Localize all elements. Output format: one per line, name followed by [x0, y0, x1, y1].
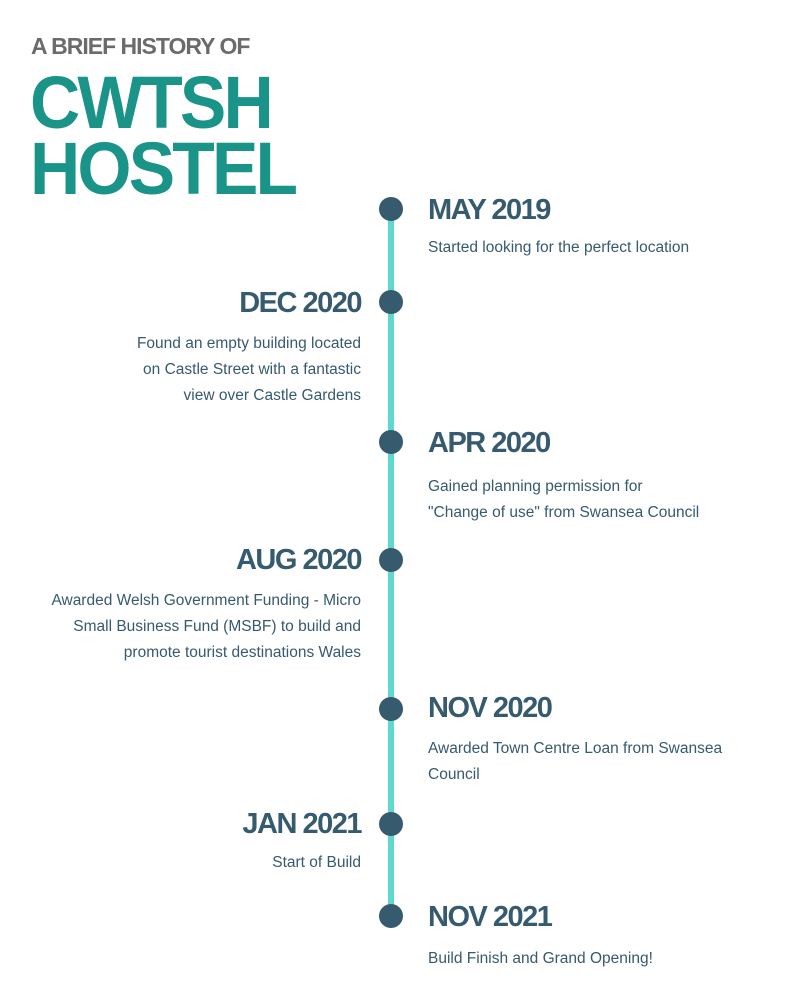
event: Dec 2020: view over Castle Gardens — [184, 387, 361, 404]
event: May 2019: Started looking for the perfect location — [428, 239, 689, 256]
timeline line — [388, 210, 394, 916]
event: Dec 2020 — [137, 287, 362, 404]
title: subtitle: A BRIEF HISTORY OF — [31, 33, 249, 59]
title: main — [30, 61, 296, 210]
event: Jan 2021: Start of Build — [272, 854, 361, 871]
dot 7 — [379, 904, 403, 928]
event: Aug 2020: promote tourist destinations Wales — [124, 644, 361, 661]
dot 1 — [379, 197, 403, 221]
event: Dec 2020: Found an empty building located — [137, 335, 361, 352]
title: main: HOSTEL — [30, 127, 295, 210]
dot 5 — [379, 697, 403, 721]
event: Apr 2020: Gained planning permission for — [428, 478, 643, 495]
event: Nov 2020 — [428, 692, 722, 783]
event: Nov 2021 — [428, 901, 653, 967]
event: Apr 2020: APR 2020 — [428, 427, 550, 459]
event: Nov 2020: Awarded Town Centre Loan from Swansea — [428, 740, 722, 757]
event: Apr 2020: "Change of use" from Swansea Council — [428, 504, 699, 521]
event: Aug 2020 — [51, 544, 362, 661]
event: Aug 2020: Awarded Welsh Government Funding - Micro — [51, 592, 361, 609]
event: Aug 2020: AUG 2020 — [236, 544, 361, 576]
event: Apr 2020 — [428, 427, 699, 521]
event: Nov 2021: NOV 2021 — [428, 901, 551, 933]
event: May 2019: MAY 2019 — [428, 194, 550, 226]
dot 4 — [379, 548, 403, 572]
event: Jan 2021: JAN 2021 — [242, 808, 361, 840]
event: Nov 2020: NOV 2020 — [428, 692, 551, 724]
event: Nov 2021: Build Finish and Grand Opening! — [428, 950, 653, 967]
dot 2 — [379, 290, 403, 314]
event: Dec 2020: on Castle Street with a fantastic — [143, 361, 361, 378]
title: main: CWTSH — [30, 61, 271, 144]
event: Nov 2020: Council — [428, 766, 480, 783]
event: May 2019 — [428, 194, 689, 256]
dot 3 — [379, 430, 403, 454]
event: Jan 2021 — [242, 808, 362, 871]
event: Dec 2020: DEC 2020 — [239, 287, 361, 319]
event: Aug 2020: Small Business Fund (MSBF) to build and — [73, 618, 361, 635]
dot 6 — [379, 812, 403, 836]
